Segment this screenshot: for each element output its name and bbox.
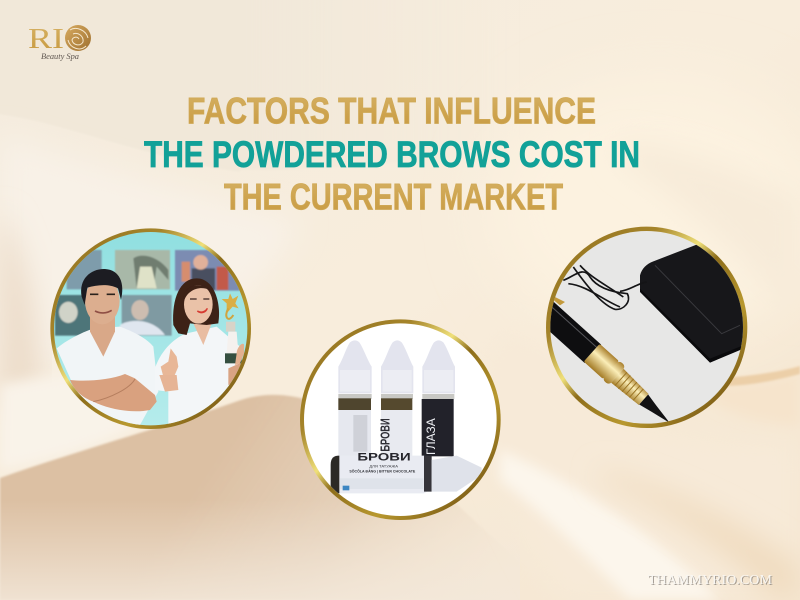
title line 2: THE POWDERED BROWS COST IN bbox=[144, 134, 640, 175]
logo: RIO Beauty Spa bbox=[28, 24, 91, 61]
pen clip end bbox=[554, 297, 565, 305]
bottle 3 bbox=[422, 340, 455, 456]
footer website label: THAMMYRIO.COM bbox=[648, 573, 773, 588]
bottle 3: ГЛАЗА bbox=[424, 418, 438, 455]
specialist: man in white coat bbox=[57, 269, 158, 425]
icon: rose bbox=[65, 25, 91, 51]
bottle 4 lying down bbox=[331, 452, 482, 493]
title line 1: FACTORS THAT INFLUENCE bbox=[187, 90, 596, 132]
bottle 2 bbox=[378, 340, 413, 457]
panel: photo of two specialists bbox=[47, 225, 253, 432]
logo wordmark: RI bbox=[28, 24, 64, 55]
bottle 4 lying down: SÔCÔLA ĐẮNG | BITTER CHOCOLATE bbox=[349, 468, 416, 473]
title bbox=[144, 90, 640, 218]
logo tagline: Beauty Spa bbox=[41, 52, 79, 61]
panel: microblading pen and foot pedal bbox=[546, 226, 748, 428]
panel: pigment ink bottles bbox=[300, 315, 507, 525]
title line 3: THE CURRENT MARKET bbox=[224, 176, 563, 218]
bottle 1 bbox=[338, 340, 372, 457]
icon: foot pedal bbox=[640, 245, 747, 363]
icon: tattoo pen bbox=[550, 302, 668, 422]
footer website label: THAMMYRIO.COM bbox=[649, 574, 774, 589]
bottle 4 lying down: ДЛЯ ТАТУАЖА bbox=[369, 465, 399, 469]
bottle 2: БРОВИ bbox=[378, 418, 392, 452]
bottle 4 lying down: БРОВИ bbox=[357, 452, 411, 464]
specialist: woman with trophy bbox=[155, 278, 244, 425]
icon: cord bbox=[563, 265, 647, 309]
